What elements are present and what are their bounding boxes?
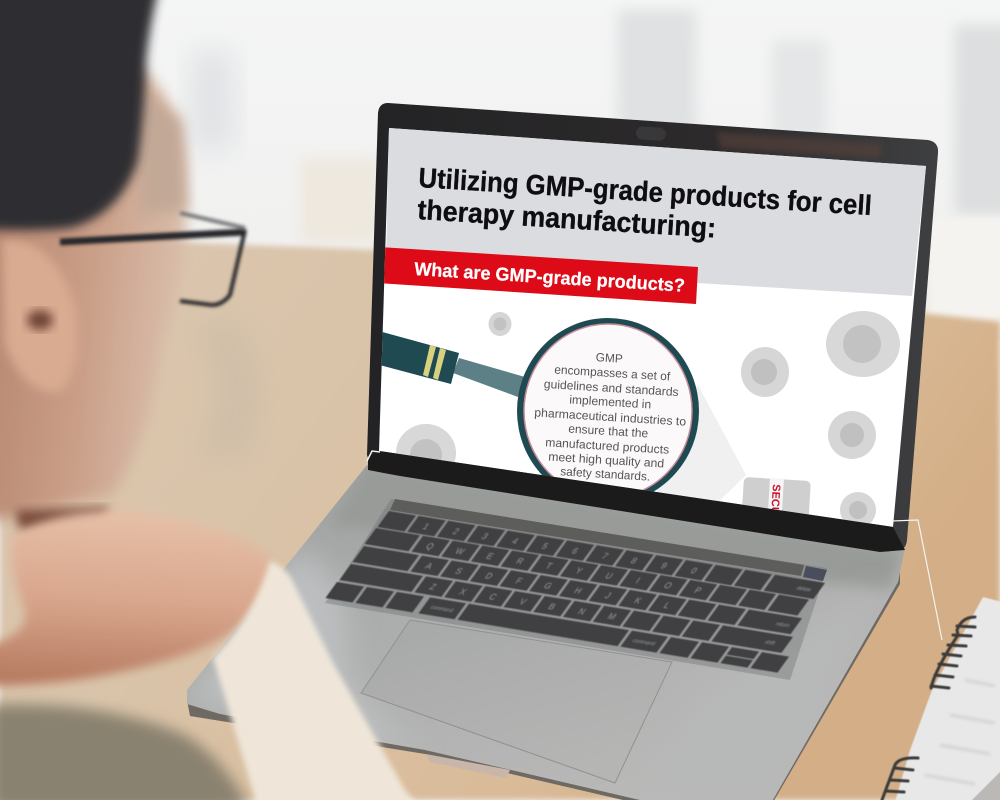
under-chin shadow	[15, 507, 110, 532]
magnifier lens with GMP definition: encompasses a set of	[554, 362, 671, 384]
qwerty row	[364, 528, 809, 615]
cream sleeve	[213, 561, 425, 800]
photo background: blurred room wall	[0, 0, 1000, 340]
bottom row: command	[429, 605, 454, 614]
spiral coil lower	[882, 758, 918, 800]
screen: grey header	[379, 128, 926, 527]
shift row: shift	[763, 640, 776, 647]
bottom row	[325, 582, 789, 673]
cells	[396, 311, 900, 528]
magnifier lens with GMP definition: guidelines and standards	[543, 377, 679, 399]
home row	[352, 546, 802, 634]
spiral coil upper	[931, 617, 975, 688]
magnifier lens with GMP definition: meet high quality and	[548, 449, 665, 471]
product bottle: SECURE	[767, 484, 782, 530]
hair	[0, 0, 163, 230]
bottom row: command	[631, 638, 656, 647]
neck and face	[0, 70, 186, 525]
webcam	[636, 126, 666, 141]
magnifier lens with GMP definition: manufactured products	[545, 435, 670, 457]
shift row: ZXCVBNM	[427, 582, 619, 621]
number row: delete	[795, 586, 812, 593]
laptop base	[180, 460, 910, 800]
wooden desk	[0, 235, 1000, 800]
home row: return	[774, 622, 791, 629]
magnifier lens with GMP definition: safety standards.	[560, 464, 651, 484]
forearm and hand	[0, 510, 270, 686]
lower bezel and hinge	[368, 451, 905, 552]
laptop lid and screen	[367, 103, 942, 640]
home row: ASDFGHJKL	[423, 561, 672, 610]
title: Utilizing GMP-grade products for cell	[418, 162, 873, 221]
glasses	[60, 213, 246, 305]
pen glare	[972, 770, 1000, 800]
handwriting on the page	[925, 680, 995, 784]
person looking at the laptop	[0, 0, 425, 800]
touch bar	[390, 499, 827, 581]
ear inner shadow	[27, 310, 53, 330]
number row	[377, 511, 825, 599]
keyboard keys	[325, 511, 825, 673]
magnifier light cone	[656, 386, 746, 502]
qwerty row: QWERTYUIOP	[424, 541, 704, 595]
hinge foot	[426, 754, 510, 778]
magnifier handle	[372, 330, 525, 397]
red banner heading	[378, 247, 698, 304]
magnifier lens with GMP definition: implemented in	[569, 393, 652, 411]
keyboard well	[325, 499, 827, 680]
trackpad	[361, 620, 672, 783]
magnifier lens with GMP definition	[517, 318, 699, 504]
magnifier lens with GMP definition: GMP	[595, 350, 623, 366]
title: therapy manufacturing:	[417, 194, 717, 244]
bezel reflection	[717, 132, 883, 158]
notebook with spiral binding	[882, 597, 1000, 800]
magnifier lens with GMP definition: ensure that the	[568, 422, 649, 440]
magnifier lens with GMP definition: pharmaceutical industries to	[534, 405, 687, 429]
product bottle	[742, 477, 810, 514]
lid bezel	[367, 103, 938, 550]
shoulder in olive sweater	[0, 704, 250, 800]
forehead highlight	[140, 90, 186, 215]
red banner heading: What are GMP-grade products?	[414, 258, 686, 296]
number row: 1234567890	[421, 522, 699, 575]
ear	[2, 240, 77, 392]
shift row	[339, 564, 793, 653]
glare lines	[367, 451, 942, 640]
